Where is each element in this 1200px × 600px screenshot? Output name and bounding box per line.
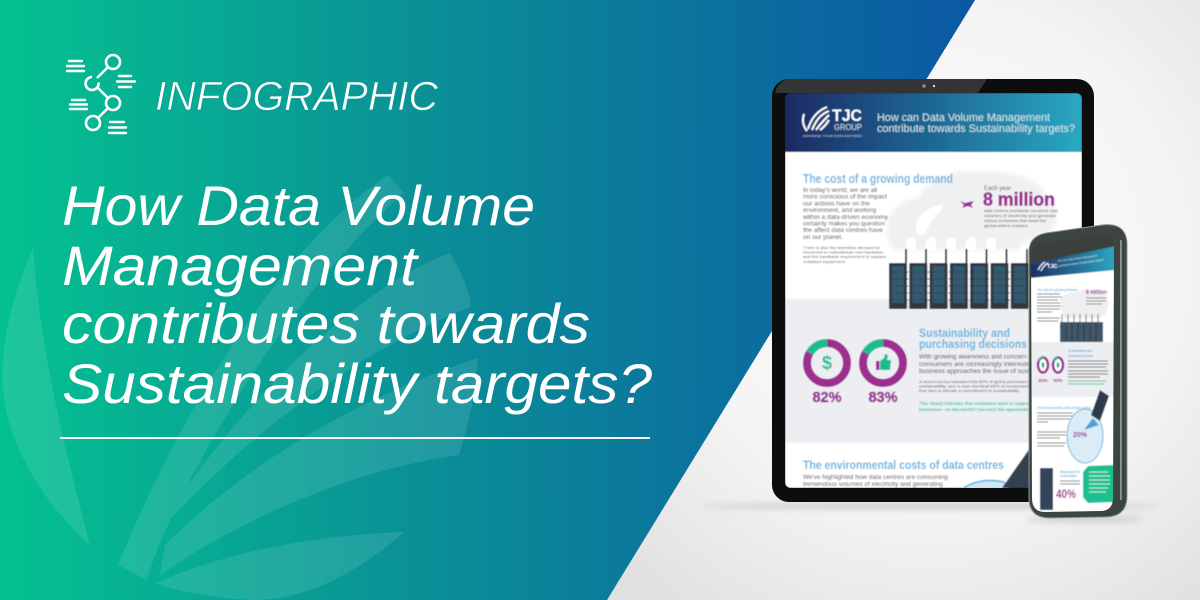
- body copy: intro: the affect data centres have: [803, 227, 884, 234]
- server tilted into globe: [1002, 449, 1028, 488]
- phone header band: [1030, 246, 1116, 278]
- phone section: cost of demand: [1037, 288, 1108, 342]
- phone header band: contribute towards Sustainability targets?: [1058, 257, 1105, 268]
- body copy: environmental costs: [803, 474, 949, 488]
- phone section: rising ahead: Rising ahead of the: [1060, 470, 1080, 474]
- body copy: intro: more conscious of the impact: [803, 194, 887, 201]
- tablet body: [772, 79, 1094, 502]
- body copy: fine print: and the inevitable requirement to replace: [803, 254, 886, 259]
- stat: 8 million: Each year: [984, 186, 1011, 192]
- label: INFOGRAPHIC: INFOGRAPHIC: [155, 73, 438, 119]
- phone header band: How can Data Volume Management: [1058, 253, 1098, 263]
- cloud of emissions: [887, 171, 1057, 250]
- tablet mockup: [772, 79, 1094, 502]
- globe arc: [962, 480, 1008, 489]
- title: contributes towards: [62, 292, 590, 355]
- section heading: environmental costs: The environmental costs of data centres: [803, 460, 1004, 472]
- donut: 82 percent: [807, 343, 847, 406]
- body copy: intro: In today's world, we are all: [803, 187, 877, 194]
- server racks with chimneys: [889, 249, 1049, 309]
- stat: 8 million: volumes of electricity and generate: [984, 214, 1056, 218]
- phone screen: [1031, 246, 1114, 512]
- section copy: sustainability and purchasing: consumers are increasingly interested in: [919, 361, 1042, 368]
- body copy: environmental costs: We've highlighted how data centres are consuming: [803, 474, 949, 481]
- phone section: purchasing decisions: 82%: [1038, 378, 1048, 383]
- phone body: [1029, 225, 1127, 518]
- stat: 8 million: 8 million: [983, 190, 1055, 210]
- body copy: fine print: [803, 245, 886, 264]
- infographic header band: contribute towards Sustainability targets?: [877, 123, 1075, 135]
- infographic header band: GROUP: [834, 123, 862, 132]
- phone section: environmental costs: [1037, 390, 1109, 463]
- body copy: intro: certainly makes you question: [803, 220, 886, 228]
- body copy: fine print: resources to manufacture new hardware,: [803, 250, 884, 255]
- body copy: fine print: outdated equipment.: [803, 259, 846, 264]
- phone status bar: [1031, 234, 1114, 265]
- tablet screen: [785, 93, 1082, 489]
- body copy: intro: environment, and working: [803, 207, 876, 214]
- icon: plane: [960, 201, 974, 208]
- section copy: sustainability and purchasing: Sustainability and: [919, 328, 1010, 340]
- title: How Data Volume: [62, 174, 535, 237]
- title: Sustainability targets?: [62, 352, 652, 415]
- infographic header band: How can Data Volume Management: [877, 112, 1050, 124]
- body copy: environmental costs: tremendous volumes of electricity and generating: [803, 481, 943, 488]
- phone section: cost of demand: 8 million: [1086, 289, 1107, 296]
- section copy: sustainability and purchasing: [918, 328, 1028, 412]
- phone header band: TJC: [1047, 264, 1057, 270]
- section copy: sustainability and purchasing: This clearly indicates that customers want to support: [919, 401, 1032, 406]
- phone section: purchasing decisions: [1030, 342, 1120, 397]
- icon: data nodes: [67, 55, 135, 133]
- body copy: intro: on our planet.: [803, 234, 843, 241]
- section copy: sustainability and purchasing: businesses – so why wouldn't you seize this opportunity?: [919, 407, 1031, 412]
- phone section: rising ahead: [1040, 465, 1114, 510]
- phone section: purchasing decisions: purchasing decisions: [1068, 354, 1093, 358]
- tablet camera bar: [775, 79, 987, 93]
- donut: 83 percent: [863, 343, 903, 406]
- section heading: cost of demand: The cost of a growing demand: [803, 172, 953, 186]
- body copy: fine print: There is also the relentless demand for: [803, 245, 881, 250]
- watermark: leaf fan logo: [2, 175, 478, 600]
- stat: 8 million: global airline industry: [984, 224, 1028, 228]
- phone mockup: [1029, 225, 1127, 518]
- phone section: cost of demand: The cost of a growing demand: [1037, 288, 1077, 292]
- section copy: sustainability and purchasing: With growing awareness and concern over: [919, 354, 1041, 360]
- phone section: environmental costs: The environmental costs of data centres: [1037, 406, 1091, 410]
- body copy: intro: [802, 187, 889, 241]
- shadow: under phone: [1025, 518, 1145, 520]
- phone section: purchasing decisions: Sustainability and: [1068, 349, 1092, 353]
- title: [62, 174, 652, 415]
- donut: 83 percent: 83%: [868, 390, 898, 406]
- stat: 8 million: carbon emissions that dwarf the: [984, 219, 1046, 223]
- grey section background: [785, 299, 1028, 443]
- section copy: sustainability and purchasing: that own or elevate a commitment to sustainability: [919, 388, 1019, 393]
- phone section: rising ahead: 40%: [1056, 489, 1076, 501]
- section copy: sustainability and purchasing: sustainability, and a near-identical 83% of consumers: [919, 384, 1029, 388]
- stat: 8 million: [983, 186, 1059, 228]
- section copy: sustainability and purchasing: A recent survey indicated that 82% of global purchasers: [919, 379, 1029, 384]
- body copy: intro: within a data-driven economy: [802, 214, 889, 221]
- stat: 8 million: data centres worldwide consume vast: [984, 209, 1059, 213]
- shadow: under tablet: [700, 504, 1160, 508]
- phone side highlight: [1120, 240, 1122, 500]
- phone section: environmental costs: 20%: [1073, 432, 1088, 439]
- phone section: rising ahead: current situation: [1060, 474, 1077, 478]
- infographic header band: MAXIMISE YOUR DATA MATTERS: [803, 134, 862, 138]
- donut: 82 percent: 82%: [812, 390, 842, 406]
- phone section: purchasing decisions: 83%: [1053, 378, 1063, 383]
- infographic header band: [785, 93, 1082, 152]
- section copy: sustainability and purchasing: purchasing decisions: [919, 339, 1027, 351]
- title: Management: [62, 234, 420, 297]
- infographic header band: TJC: [832, 106, 862, 125]
- donut: 82 percent: $: [822, 353, 832, 373]
- divider rule under title: [60, 437, 650, 439]
- section copy: sustainability and purchasing: business approaches the issue of sustainability: [919, 368, 1056, 375]
- body copy: intro: our actions have on the: [803, 200, 871, 207]
